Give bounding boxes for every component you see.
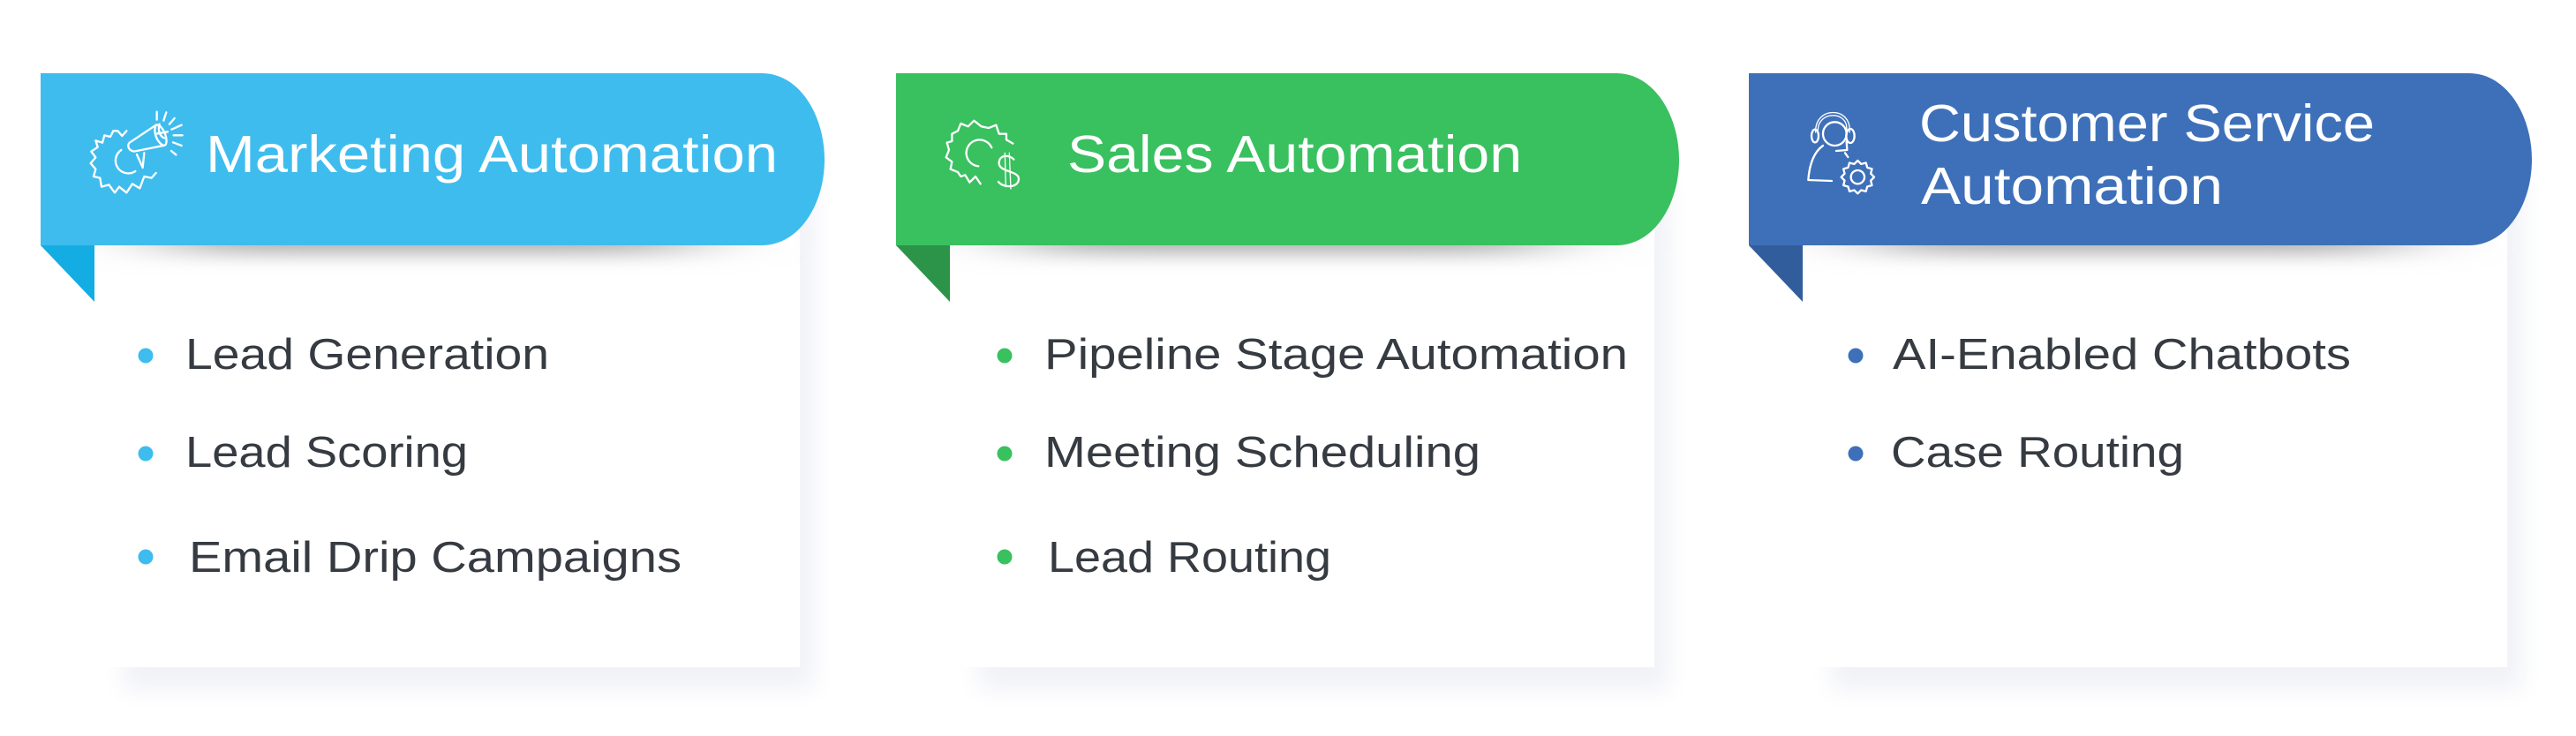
list item: case routing: Case Routing <box>1891 429 2184 477</box>
icon: gear with megaphone <box>91 112 183 192</box>
card body: customer service <box>1814 159 2507 667</box>
list item: email drip campaigns: Email Drip Campaigns <box>189 534 682 582</box>
list item: pipeline stage automation: Pipeline Stage Automation <box>1044 331 1628 379</box>
panel: sales automation <box>896 73 1679 690</box>
card body: sales <box>961 159 1654 667</box>
icon: support agent with gear <box>1808 112 1874 193</box>
heading: marketing automation: Marketing Automation <box>206 125 778 184</box>
panel: customer service automation <box>1749 73 2532 690</box>
list item: lead scoring: Lead Scoring <box>185 429 468 477</box>
list item: lead generation: Lead Generation <box>185 331 549 379</box>
ribbon fold: sales <box>896 245 950 302</box>
ribbon fold: customer service <box>1749 245 1803 302</box>
ribbon header: marketing <box>41 73 825 245</box>
card body: marketing <box>106 159 800 667</box>
heading: customer service automation: Automation <box>1921 157 2223 215</box>
ribbon header: sales <box>896 73 1679 245</box>
panel: marketing automation <box>41 73 825 690</box>
ribbon fold: marketing <box>41 245 94 302</box>
list item: meeting scheduling: Meeting Scheduling <box>1044 429 1480 477</box>
icon: gear with dollar sign <box>946 121 1019 189</box>
heading: customer service automation <box>1919 94 2375 215</box>
heading: sales automation: Sales Automation <box>1067 125 1522 184</box>
list item: ai-enabled chatbots: AI-Enabled Chatbots <box>1893 331 2351 379</box>
heading: customer service automation: Customer Service <box>1919 94 2375 153</box>
ribbon header: customer service <box>1749 73 2532 245</box>
list item: lead routing: Lead Routing <box>1048 534 1331 582</box>
